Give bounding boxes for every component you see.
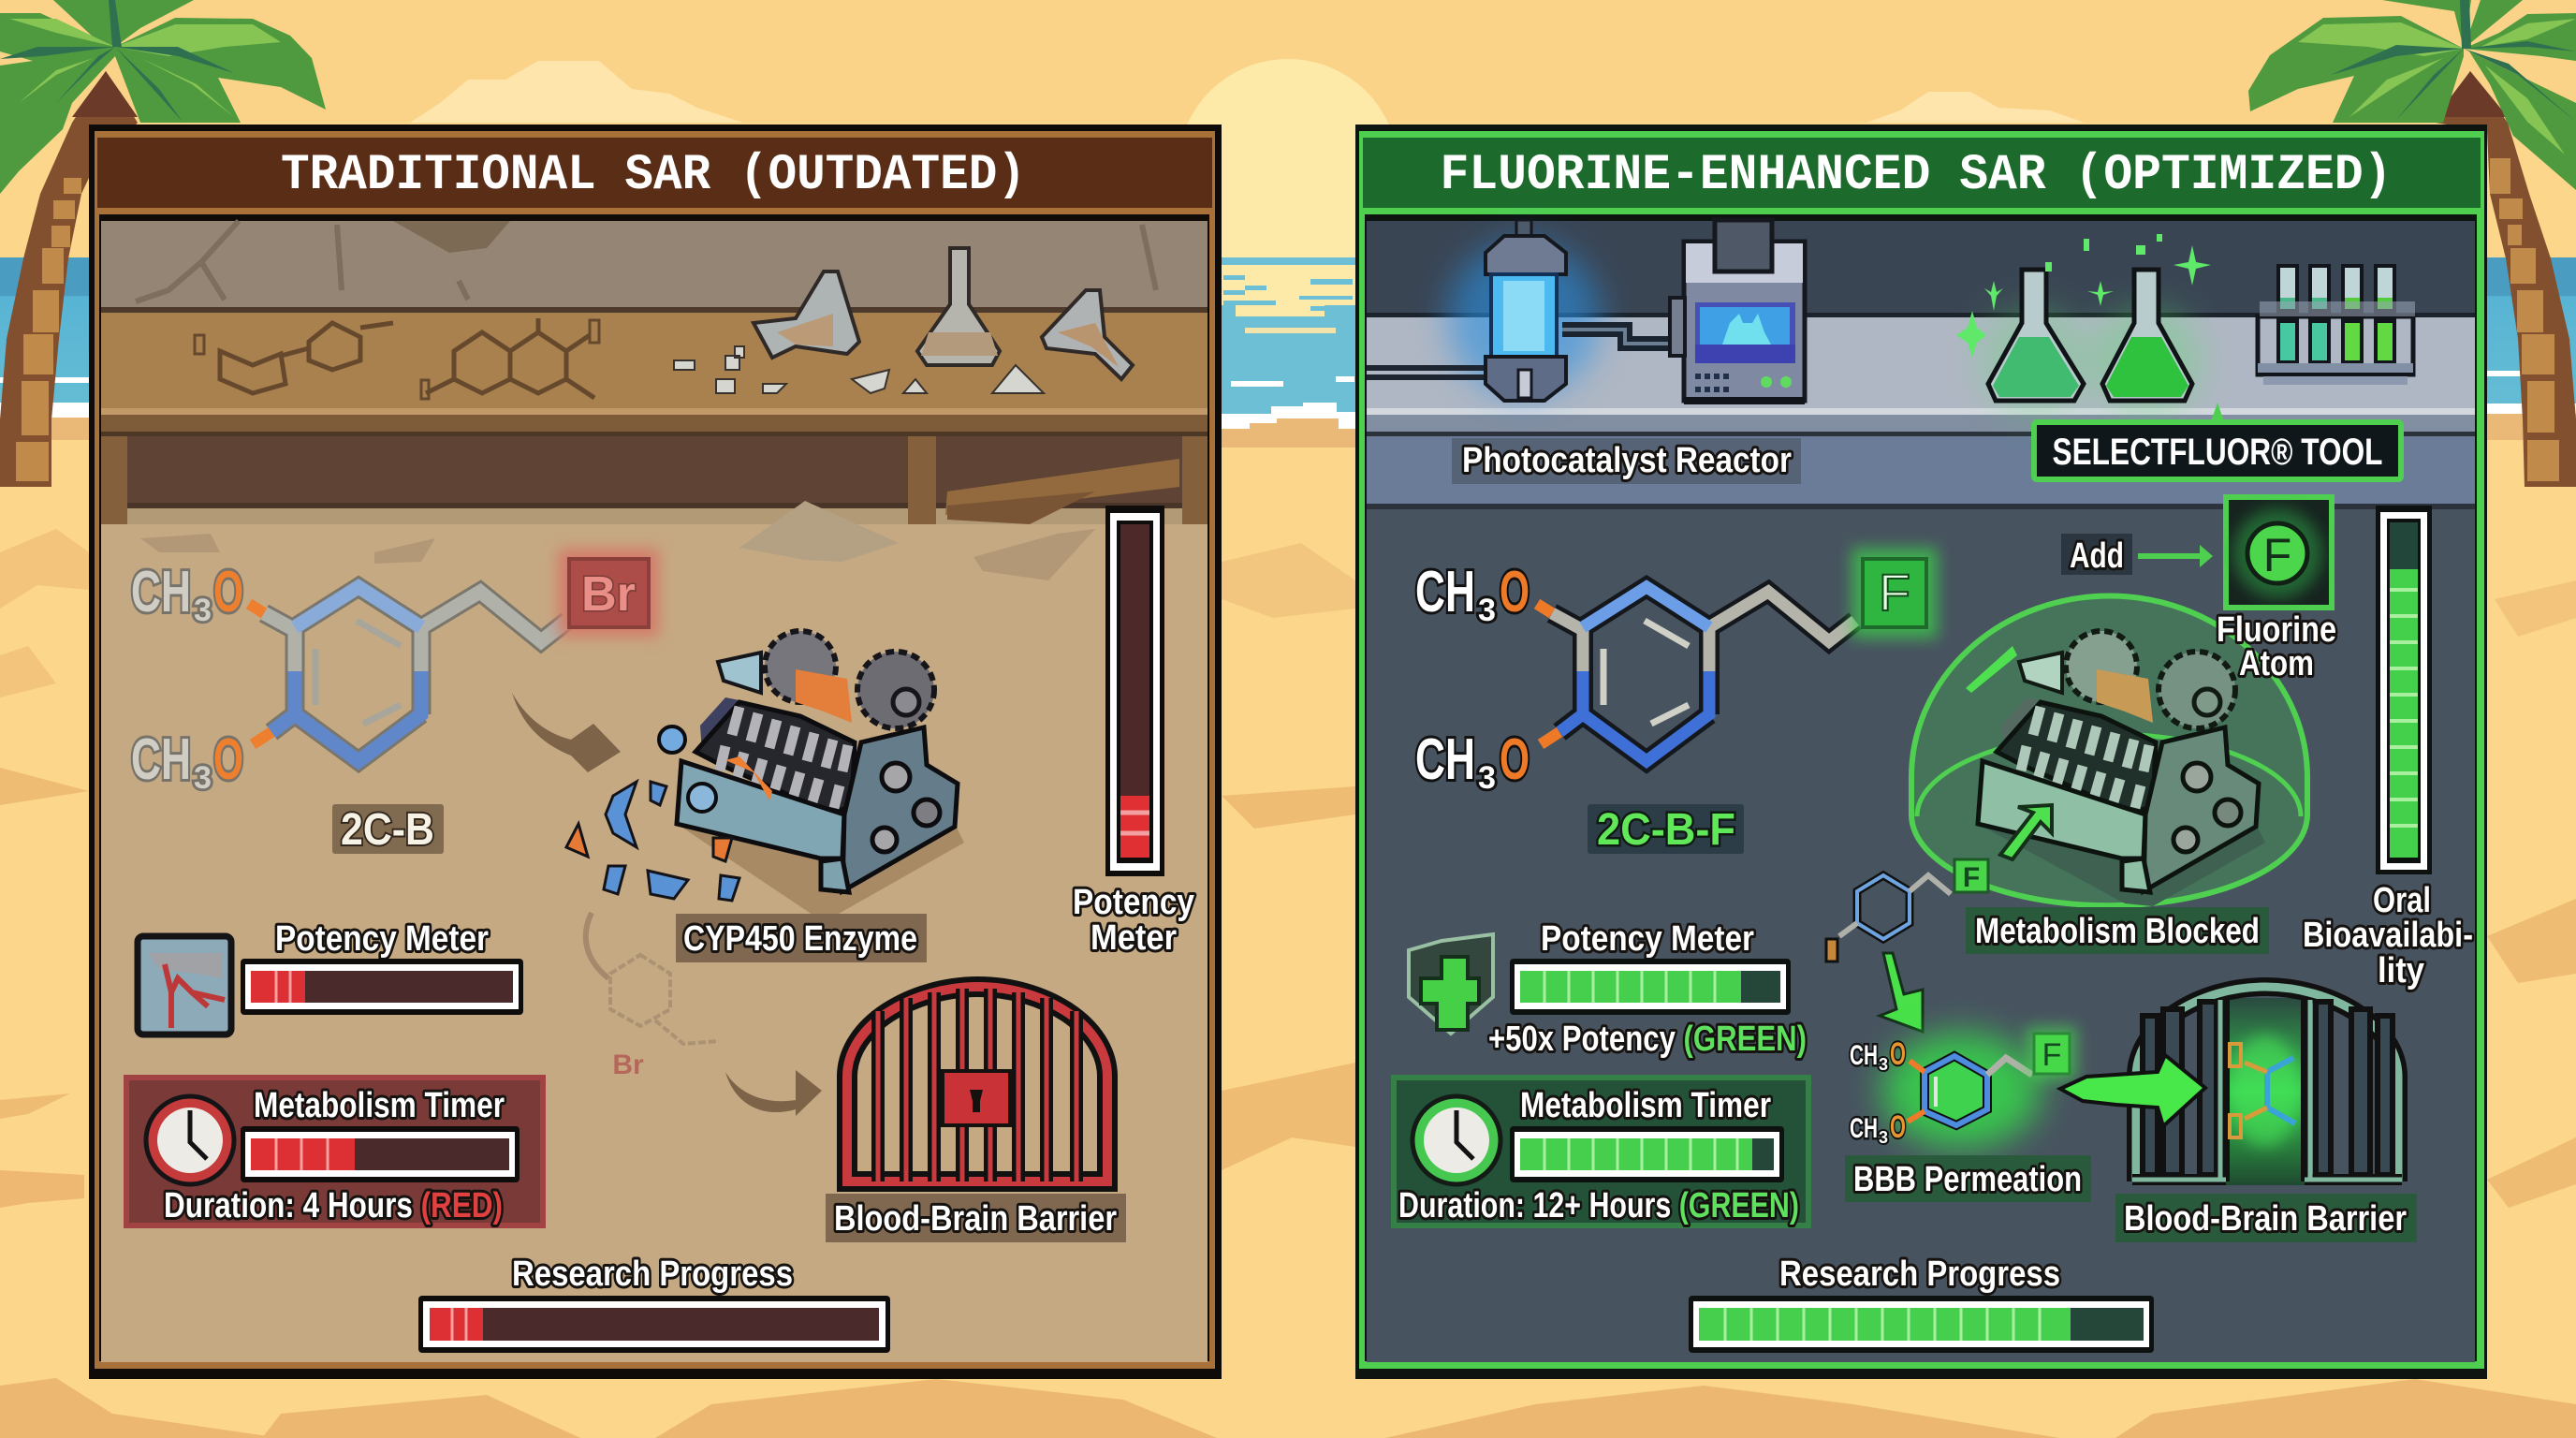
label: potency meter: Potency Meter [1541, 919, 1754, 959]
lab bench scene [101, 221, 1208, 529]
research progress bar [1689, 1296, 2154, 1353]
floor [1367, 509, 2475, 1362]
label: oral bioavailability: Bioavailabi- [2303, 916, 2473, 955]
shield dome over enzyme [1911, 596, 2307, 906]
panel: traditional SAR [89, 125, 1222, 1379]
label: selectfluor tool: SELECTFLUOR® TOOL [2052, 432, 2383, 473]
arrow: down to permeation [1880, 953, 1923, 1032]
panel: fluorine-enhanced SAR [1355, 125, 2487, 1379]
icon: photocatalyst reactor [1367, 220, 1676, 401]
sun [1178, 59, 1398, 280]
metabolism timer box [124, 1075, 546, 1228]
metabolism timer box: Metabolism Timer [1520, 1086, 1771, 1125]
icon: blocked enzyme [1978, 631, 2265, 906]
bolts [2183, 763, 2211, 791]
chalk structures on bench [220, 318, 594, 398]
icon: clock [146, 1096, 234, 1184]
header: traditional SAR [97, 138, 1212, 208]
icon: test tube rack [2258, 264, 2415, 385]
methoxy labels: 3 [1478, 593, 1496, 628]
glass shards [674, 346, 1044, 393]
icon: clock [1412, 1096, 1500, 1184]
molecule: 2C-B [131, 549, 659, 796]
methoxy labels: CH [131, 727, 191, 792]
methoxy labels: 3 [1879, 1055, 1888, 1074]
panel frame [89, 125, 1222, 1379]
potency bar [241, 959, 523, 1015]
panel frame [1355, 125, 2487, 1379]
bolts [882, 763, 910, 791]
methoxy labels: CH [1415, 727, 1475, 792]
methoxy labels: O [1890, 1109, 1906, 1145]
methoxy labels: 3 [1879, 1128, 1888, 1147]
label: photocatalyst reactor: Photocatalyst Reactor [1462, 441, 1792, 480]
sea right [2481, 257, 2576, 415]
sea left [0, 257, 103, 415]
methoxy labels [1850, 1036, 1906, 1147]
icon: closed blood-brain barrier [847, 987, 1107, 1181]
label: potency meter vertical: Potency [1073, 883, 1194, 922]
molecule: BBB permeation [1850, 1026, 2077, 1149]
icon: open blood-brain barrier [2132, 987, 2402, 1185]
methoxy labels: O [213, 560, 243, 624]
gear [2159, 652, 2235, 728]
metabolism timer box [1391, 1075, 1811, 1228]
label: add: Add [2070, 536, 2124, 576]
icon: CYP450 enzyme shredder [566, 631, 964, 922]
timer bar [1510, 1126, 1784, 1182]
label: oral bioavailability: Oral [2373, 881, 2431, 920]
methoxy labels: O [1500, 560, 1530, 624]
arrow: add to fluorine [2138, 545, 2213, 567]
label: potency meter vertical: Meter [1090, 918, 1177, 958]
palm tree right [2248, 0, 2576, 487]
label: fluorine atom: Fluorine [2217, 610, 2336, 650]
sparkles [1956, 234, 2211, 358]
fluorine atom tile [2226, 497, 2332, 608]
fluorine atom [1852, 548, 1938, 638]
fluorine atom: F [1879, 563, 1910, 622]
icon: analyzer instrument [1670, 220, 1805, 404]
timer bar [241, 1126, 520, 1182]
bromine atom [558, 549, 659, 637]
research progress bar [418, 1296, 890, 1353]
arrow: into barrier [2060, 1055, 2205, 1126]
label: selectfluor tool [2034, 403, 2401, 479]
label: CYP450 enzyme: CYP450 Enzyme [683, 919, 917, 959]
label: potency meter: Potency Meter [275, 919, 489, 959]
icon: glowing green flasks [1956, 234, 2211, 417]
small molecule with F [1826, 859, 1988, 961]
header: traditional SAR: TRADITIONAL SAR (OUTDATED) [281, 147, 1026, 204]
label: oral bioavailability [2303, 881, 2473, 990]
header: fluorine-enhanced SAR: FLUORINE-ENHANCED SAR (OPTIMIZED) [1440, 147, 2393, 204]
methoxy labels: O [213, 727, 243, 792]
metabolism timer box: Metabolism Timer [254, 1086, 505, 1125]
floor [101, 501, 1208, 1362]
fluorine atom [2027, 1026, 2077, 1080]
methoxy labels: O [1890, 1036, 1906, 1072]
cloud right [1866, 92, 2085, 123]
label: blood-brain barrier: Blood-Brain Barrier [2124, 1199, 2407, 1239]
arrow to enzyme [512, 693, 621, 772]
barrier cells [2143, 1002, 2393, 1175]
lock [943, 1071, 1010, 1125]
label: metabolism blocked: Metabolism Blocked [1975, 912, 2260, 951]
methoxy labels: O [1500, 727, 1530, 792]
methoxy labels [1415, 560, 1530, 796]
methoxy labels: CH [1415, 560, 1475, 624]
label: 2C-B-F: 2C-B-F [1597, 805, 1735, 855]
methoxy labels: 3 [194, 593, 212, 628]
gear [857, 652, 934, 728]
label: fluorine atom: Atom [2239, 644, 2314, 683]
label: potency meter vertical [1073, 883, 1194, 958]
gear [2066, 631, 2137, 702]
label: +50x potency: +50x Potency (GREEN) [1488, 1020, 1807, 1059]
gear [765, 631, 836, 702]
fluorine atom tile: F [2263, 529, 2291, 581]
palm tree left [0, 0, 326, 487]
cloud left [410, 61, 743, 123]
metabolism timer box: Duration: 12+ Hours (GREEN) [1398, 1186, 1799, 1225]
bromine atom: Br [581, 567, 636, 622]
label: blood-brain barrier: Blood-Brain Barrier [834, 1199, 1117, 1239]
ghost molecule [586, 913, 719, 1080]
methoxy labels: 3 [194, 760, 212, 796]
molecule debris [604, 782, 739, 901]
permeating molecule [2230, 1044, 2295, 1137]
methoxy labels: CH [1850, 1113, 1878, 1144]
icon: cracked gauge [138, 936, 231, 1034]
methoxy labels: CH [1850, 1040, 1878, 1071]
label: 2C-B: 2C-B [341, 805, 434, 855]
label: oral bioavailability: lity [2378, 951, 2424, 990]
ghost molecule: Br [612, 1049, 644, 1080]
sea centre with sun reflection [1217, 126, 1362, 448]
label: BBB permeation: BBB Permeation [1853, 1160, 2082, 1199]
vertical potency meter [1105, 506, 1164, 876]
arrow: blocked deflection [2000, 805, 2052, 859]
vertical oral bioavailability meter [2376, 506, 2432, 874]
metabolism timer box: Duration: 4 Hours (RED) [164, 1186, 503, 1225]
small molecule with F: F [1963, 862, 1980, 893]
methoxy labels: 3 [1478, 760, 1496, 796]
arrow to barrier [725, 1070, 822, 1116]
potency bar [1510, 959, 1791, 1015]
fluorine atom: F [2042, 1037, 2061, 1073]
modern lab bench [1367, 221, 2475, 509]
methoxy labels: CH [131, 560, 191, 624]
sand patches [0, 529, 89, 609]
label: fluorine atom [2217, 610, 2336, 683]
icon: shield with plus [1409, 934, 1493, 1034]
molecule: 2C-B-F [1415, 548, 1938, 796]
broken flasks [754, 248, 1133, 379]
label: research progress: Research Progress [1779, 1255, 2060, 1294]
methoxy labels [131, 560, 243, 796]
label: research progress: Research Progress [512, 1255, 793, 1294]
